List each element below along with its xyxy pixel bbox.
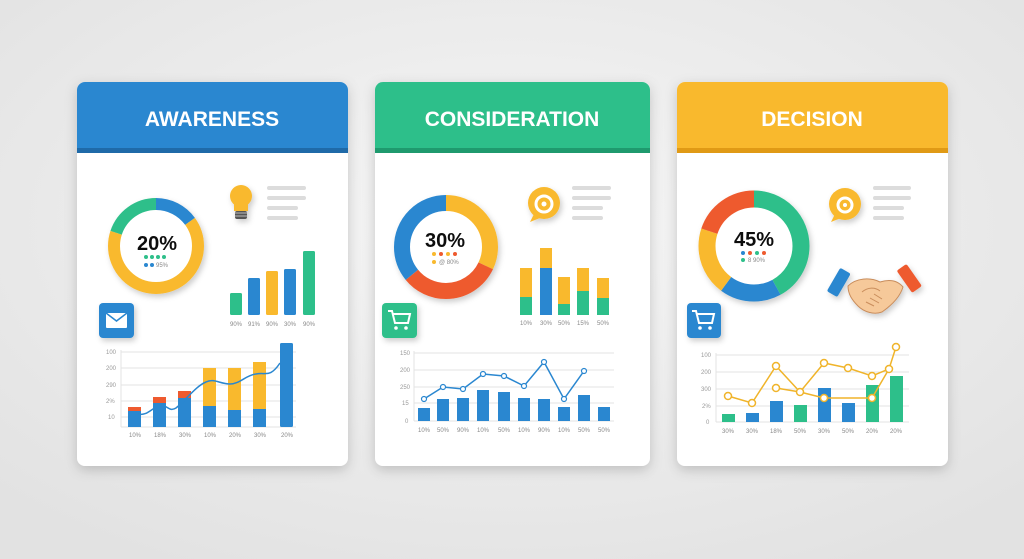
bar line chart consideration: 50% (598, 428, 611, 434)
bar line chart consideration: 150 (400, 351, 411, 357)
text lines (267, 186, 306, 220)
combo chart awareness (106, 343, 296, 439)
bar chart small: 30% (284, 322, 297, 328)
icon: cart green (382, 303, 417, 338)
stacked bar chart: 50% (597, 321, 610, 327)
bar line chart consideration: 90% (538, 428, 551, 434)
bar line chart consideration: 10% (558, 428, 571, 434)
stacked bar chart: 15% (577, 321, 590, 327)
stacked bar chart (520, 248, 610, 327)
bar chart small: 90% (266, 322, 279, 328)
bar line chart decision: 2% (702, 404, 711, 410)
bar chart small: 90% (303, 322, 316, 328)
combo chart awareness: 290 (106, 383, 117, 389)
donut chart 45% (707, 199, 801, 293)
icon: target bubble (528, 187, 560, 222)
bar line chart consideration: 50% (578, 428, 591, 434)
combo chart awareness: 20% (229, 433, 242, 439)
header: decision (677, 82, 948, 153)
bar line chart decision: 18% (770, 429, 783, 435)
header: awareness (77, 82, 348, 153)
donut chart 30%: 30% (425, 230, 465, 252)
bar line chart decision: 50% (794, 429, 807, 435)
bar line chart decision: 30% (722, 429, 735, 435)
donut chart 45%: 45% (734, 229, 774, 251)
donut chart 30% (402, 203, 490, 291)
combo chart awareness: 30% (179, 433, 192, 439)
combo chart awareness: 18% (154, 433, 167, 439)
panel: awareness (77, 82, 348, 466)
bar line chart consideration (400, 351, 614, 434)
stacked bar chart: 30% (540, 321, 553, 327)
bar line chart decision: 100 (701, 353, 712, 359)
combo chart awareness: 200 (106, 366, 117, 372)
bar chart small: 91% (248, 322, 261, 328)
icon: handshake (827, 264, 922, 313)
donut chart 20%: 95% (156, 263, 169, 269)
bar chart small: 90% (230, 322, 243, 328)
bar line chart decision: 20% (890, 429, 903, 435)
combo chart awareness: 10% (129, 433, 142, 439)
header: consideration: CONSIDERATION (425, 108, 599, 131)
icon: light bulb (230, 185, 252, 219)
bar line chart decision (701, 344, 909, 435)
bar line chart decision: 50% (842, 429, 855, 435)
bar line chart consideration: 90% (457, 428, 470, 434)
combo chart awareness: 10 (108, 415, 115, 421)
bar line chart decision: 200 (701, 370, 712, 376)
combo chart awareness: 20% (281, 433, 294, 439)
bar line chart consideration: 50% (498, 428, 511, 434)
combo chart awareness: 10% (204, 433, 217, 439)
bar line chart consideration: 10% (518, 428, 531, 434)
header: decision: DECISION (761, 108, 863, 131)
text lines (873, 186, 911, 220)
header: awareness: AWARENESS (145, 108, 279, 131)
combo chart awareness: 30% (254, 433, 267, 439)
donut chart 30%: @ 80% (439, 260, 459, 266)
combo chart awareness: 2% (106, 399, 115, 405)
bar line chart decision: 30% (746, 429, 759, 435)
bar line chart consideration: 200 (400, 368, 411, 374)
bar line chart decision: 300 (701, 387, 712, 393)
combo chart awareness: 100 (106, 350, 117, 356)
bar line chart decision: 30% (818, 429, 831, 435)
donut chart 20%: 20% (137, 233, 177, 255)
panel: decision (677, 82, 948, 466)
icon: cart blue (687, 303, 721, 338)
header: consideration (375, 82, 650, 153)
bar line chart consideration: 50% (437, 428, 450, 434)
icon: mail (99, 303, 134, 338)
stacked bar chart: 50% (558, 321, 571, 327)
bar chart small (230, 251, 316, 328)
panel: consideration (375, 82, 650, 466)
bar line chart consideration: 15 (402, 401, 409, 407)
text lines (572, 186, 611, 220)
bar line chart consideration: 10% (477, 428, 490, 434)
stacked bar chart: 10% (520, 321, 533, 327)
donut chart 20% (114, 204, 198, 288)
bar line chart consideration: 0 (405, 419, 409, 425)
bar line chart decision: 20% (866, 429, 879, 435)
icon: target bubble orange (829, 188, 861, 222)
bar line chart decision: 0 (706, 420, 710, 426)
bar line chart consideration: 250 (400, 385, 411, 391)
bar line chart consideration: 10% (418, 428, 431, 434)
donut chart 45%: 8 90% (748, 258, 766, 264)
